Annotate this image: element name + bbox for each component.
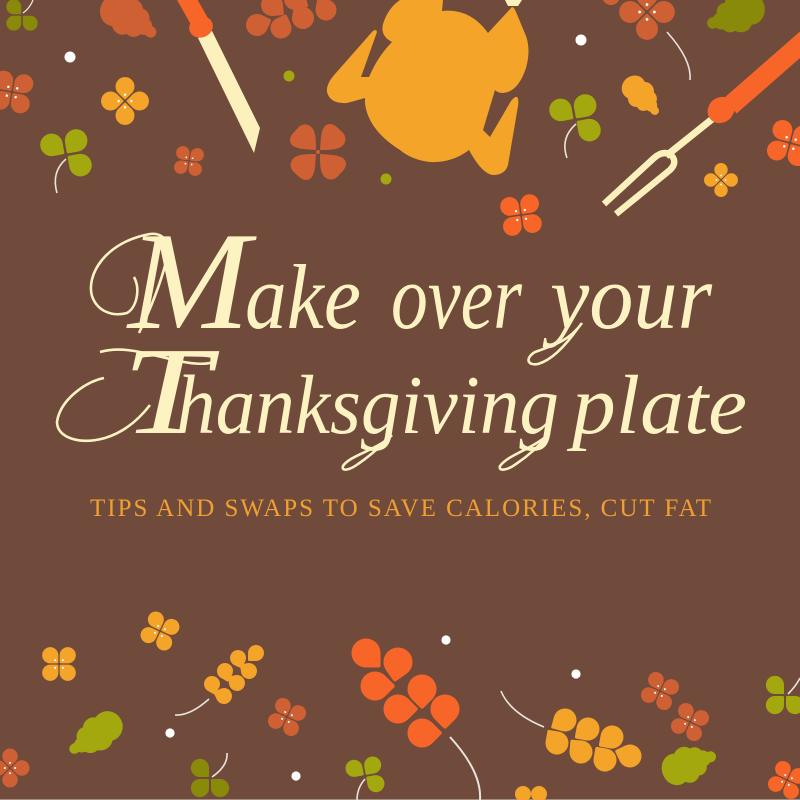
title: ake xyxy=(245,246,361,348)
icon: olive clover bottom xyxy=(191,753,229,797)
icon: green clover right xyxy=(547,92,603,158)
icon: orange flower bottom right xyxy=(765,758,800,800)
subtitle: TIPS AND SWAPS TO SAVE CALORIES, CUT FAT xyxy=(90,495,711,522)
title: plate xyxy=(567,359,747,452)
icon: orange flower right edge xyxy=(765,118,800,168)
icon: large orange sprig xyxy=(351,638,480,800)
icon: yellow leaf xyxy=(616,69,669,123)
icon: carving fork xyxy=(604,36,800,214)
icon: large four-petal flower xyxy=(290,124,346,180)
icon: green leaf bottom right xyxy=(656,737,722,791)
icon: flower left edge xyxy=(0,69,35,115)
icon: green clover xyxy=(38,127,94,193)
icon: small yellow flower xyxy=(701,160,741,200)
icon: white dot xyxy=(291,771,301,781)
title: T xyxy=(122,323,219,461)
icon: orange flower centre xyxy=(499,193,543,237)
icon: flower pair top xyxy=(638,669,682,713)
icon: flower pair bottom xyxy=(668,700,712,744)
icon: white dot xyxy=(441,635,451,645)
icon: roast turkey xyxy=(327,0,528,175)
icon: green dot lower xyxy=(380,174,392,184)
title: hanksgiving xyxy=(176,359,559,452)
icon: green clover bottom xyxy=(344,755,386,800)
icon: yellow sprig right xyxy=(501,691,645,773)
icon: sprig top right xyxy=(602,0,690,80)
title xyxy=(57,204,747,470)
icon: yellow flower tilted xyxy=(138,609,182,653)
icon: yellow flower xyxy=(97,73,153,129)
icon: white dot xyxy=(64,52,76,62)
icon: white dot xyxy=(576,34,586,46)
icon: leaf top left xyxy=(93,0,166,51)
icon: green leaf bottom left xyxy=(61,704,130,767)
icon: white dot xyxy=(165,728,175,738)
icon: yellow flower bottom edge xyxy=(515,786,547,800)
icon: carving knife xyxy=(184,0,260,153)
title: your xyxy=(542,246,713,348)
icon: flower lower left edge xyxy=(0,745,33,791)
title: over xyxy=(391,246,523,348)
icon: small flower xyxy=(173,145,205,177)
icon: yellow flower bottom left xyxy=(42,647,76,681)
title: M xyxy=(126,204,258,359)
icon: green dot xyxy=(284,70,294,82)
icon: white dot xyxy=(571,669,581,679)
icon: yellow sprig xyxy=(175,645,264,715)
icon: olive leaf top right xyxy=(700,0,771,44)
icon: flower bottom xyxy=(265,695,309,739)
icon: green clover right edge xyxy=(766,676,800,714)
icon: olive clover top left xyxy=(6,0,38,31)
icon: sprig top centre xyxy=(242,0,338,42)
